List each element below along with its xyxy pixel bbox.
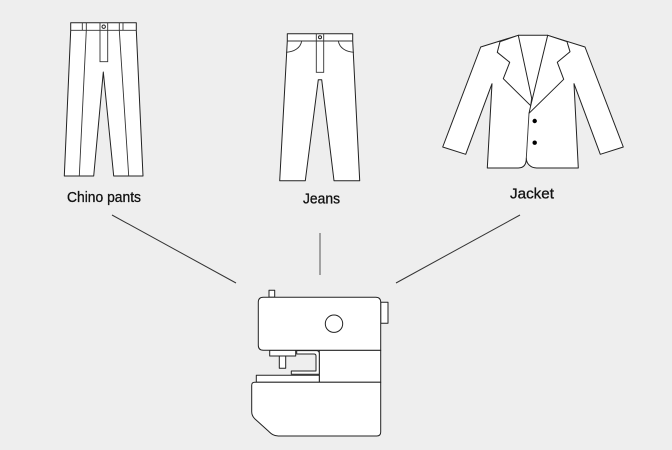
needle <box>279 356 286 368</box>
connector: chino pants to machine <box>112 215 236 283</box>
label: jeans: Jeans <box>303 190 340 207</box>
icon: jeans <box>280 34 360 181</box>
upper arm <box>258 297 381 350</box>
column <box>319 350 381 382</box>
needle plate <box>256 375 319 382</box>
icon: chino pants <box>64 23 143 176</box>
icon: jacket <box>443 35 623 168</box>
icon: sewing machine <box>252 290 388 436</box>
spool pin <box>269 290 275 297</box>
label: jacket: Jacket <box>510 185 555 202</box>
base <box>252 382 381 436</box>
connector: jeans to machine <box>319 233 321 275</box>
dial <box>325 315 343 332</box>
right hand wheel <box>381 302 388 323</box>
connector: jacket to machine <box>396 215 520 283</box>
label: chino pants: Chino pants <box>67 189 141 206</box>
needle holder <box>270 350 296 356</box>
bobbin hook <box>291 351 319 374</box>
